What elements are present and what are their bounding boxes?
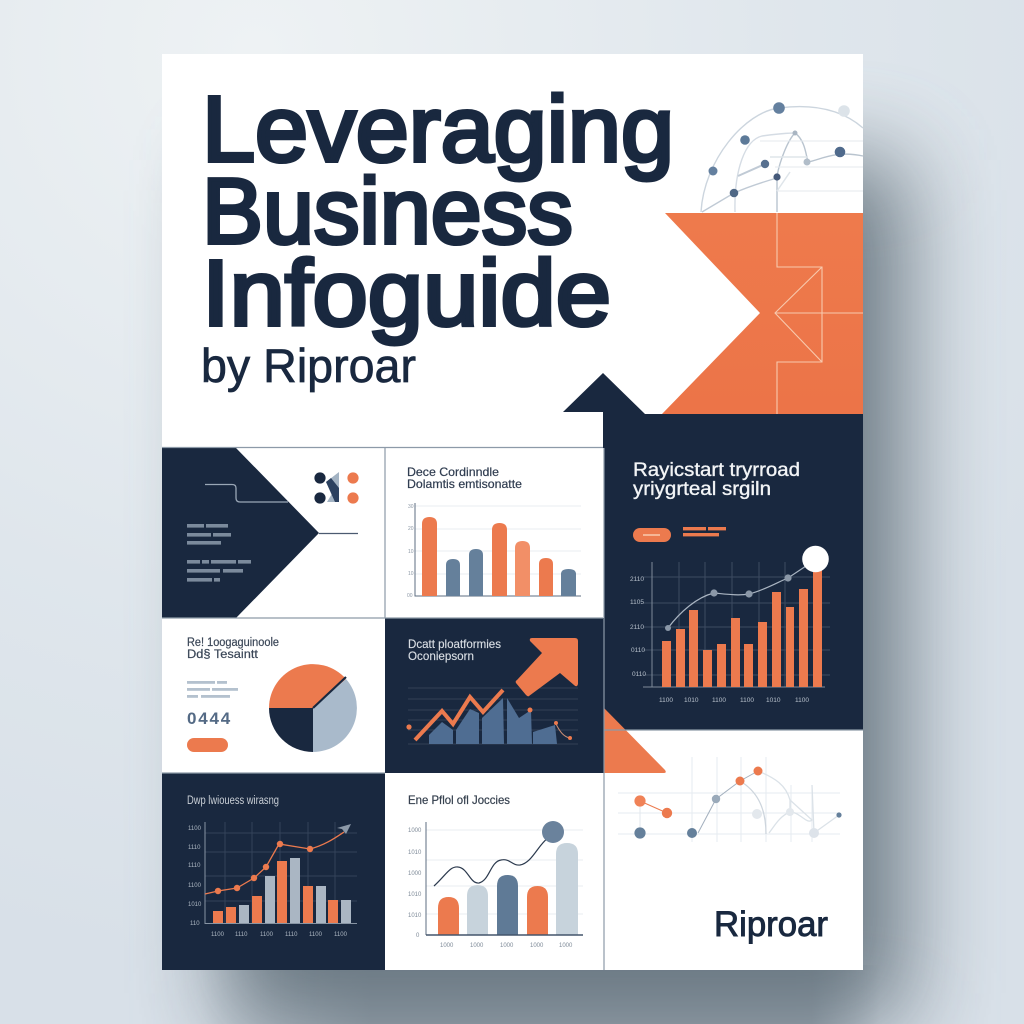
placeholder text lines	[187, 524, 251, 582]
panel: rounded bar chart light: 0	[416, 933, 420, 939]
rounded chart heading: Ene Pflol ofl Joccies	[408, 793, 510, 807]
panel: bar chart light	[407, 465, 581, 599]
panel: rounded bar chart light: 1000	[440, 943, 454, 949]
panel: navy combo chart: 1110	[188, 863, 201, 869]
title: Business	[202, 159, 573, 263]
featured heading	[633, 460, 800, 500]
pie placeholder lines	[187, 681, 238, 698]
small orange triangle	[604, 708, 666, 773]
featured bar and line chart: 1105	[630, 599, 644, 606]
growth area chart	[429, 698, 557, 744]
panel: navy featured chart	[563, 373, 863, 730]
navy up arrow	[563, 373, 645, 448]
panel: rounded bar chart light: 1000	[408, 871, 422, 877]
featured bar and line chart: 1100	[712, 697, 726, 704]
featured heading: yriygrteal srgiln	[633, 479, 771, 500]
panel: rounded bar chart light	[408, 793, 583, 949]
panel: navy combo chart: 1110	[188, 845, 201, 851]
panel: navy combo chart: 1100	[188, 883, 202, 889]
panel: bar chart light: 10	[408, 549, 414, 555]
featured bar and line chart: 1100	[659, 697, 673, 704]
combo heading: Dwp lwiouess wirasng	[187, 795, 279, 807]
panel: navy chevron with text lines	[162, 448, 359, 618]
pie heading	[187, 637, 279, 661]
panel: rounded bar chart light: 1010	[408, 850, 422, 856]
featured heading: Rayicstart tryrroad	[633, 460, 800, 481]
growth heading	[408, 637, 501, 663]
panel: bar chart light: 00	[407, 593, 413, 599]
pie heading: Dd§ Tesaintt	[187, 649, 259, 661]
panel: rounded bar chart light: 1010	[408, 913, 422, 919]
panel: rounded bar chart light: 1000	[470, 943, 484, 949]
title: Infoguide	[202, 241, 611, 345]
featured bar and line chart: 2110	[630, 576, 644, 583]
growth heading: Dcatt ploatformies	[408, 637, 501, 651]
title	[202, 77, 674, 345]
featured bar and line chart: 0110	[632, 671, 646, 678]
featured bar and line chart: 1100	[795, 697, 809, 704]
chart heading: Dece Cordinndle	[407, 465, 499, 479]
pie graphic	[269, 664, 357, 752]
brand logo: Riproar	[714, 905, 828, 944]
growth arrow	[516, 638, 578, 696]
featured bar and line chart	[630, 546, 830, 704]
featured bar and line chart: 1010	[766, 697, 781, 704]
growth heading: Oconiepsorn	[408, 649, 474, 663]
pie heading: Re! 1oogaguinoole	[187, 637, 279, 649]
panel: rounded bar chart light: 1000	[559, 943, 573, 949]
panel: navy combo chart: 110	[190, 921, 200, 927]
panel: navy combo chart: 1100	[188, 826, 202, 832]
pie button	[187, 738, 228, 752]
network diagram top right	[701, 102, 863, 212]
title: Leveraging	[202, 77, 674, 181]
panel: bar chart light: 10	[408, 571, 414, 577]
chart heading: Dolamtis emtisonatte	[407, 477, 522, 491]
panel: navy combo chart: 1100	[309, 932, 323, 938]
poster sheet	[162, 54, 863, 970]
subtitle: by Riproar	[201, 339, 416, 392]
panel: bar chart light: 30	[408, 504, 414, 510]
featured bar and line chart: 1100	[740, 697, 754, 704]
panel: bar chart light: 20	[408, 526, 414, 532]
featured bar and line chart: 0110	[631, 647, 645, 654]
panel: navy combo chart: 1010	[188, 902, 202, 908]
icon: logo cluster	[314, 472, 359, 504]
panel dividers	[162, 448, 863, 970]
icon: trend arrowhead	[337, 824, 351, 834]
panel: navy growth chart	[385, 618, 604, 773]
panel: navy combo chart: 1110	[235, 932, 248, 938]
panel: rounded bar chart light: 1000	[500, 943, 514, 949]
panel: navy combo chart: 1110	[285, 932, 298, 938]
panel: pie chart	[187, 637, 357, 752]
featured pill legend	[633, 527, 726, 542]
chart heading	[407, 465, 522, 491]
featured bar and line chart: 1010	[684, 697, 699, 704]
panel: rounded bar chart light: 1010	[408, 892, 422, 898]
panel: navy combo chart	[162, 773, 385, 970]
orange chevron banner	[662, 213, 863, 414]
featured bar and line chart: 2110	[630, 624, 644, 631]
pie value: 0444	[187, 709, 232, 728]
panel: navy combo chart: 1100	[211, 932, 225, 938]
panel: navy combo chart: 1100	[334, 932, 348, 938]
panel: rounded bar chart light: 1000	[530, 943, 544, 949]
panel: navy combo chart: 1100	[260, 932, 274, 938]
network diagram bottom right	[618, 757, 842, 842]
panel: rounded bar chart light: 1000	[408, 828, 422, 834]
